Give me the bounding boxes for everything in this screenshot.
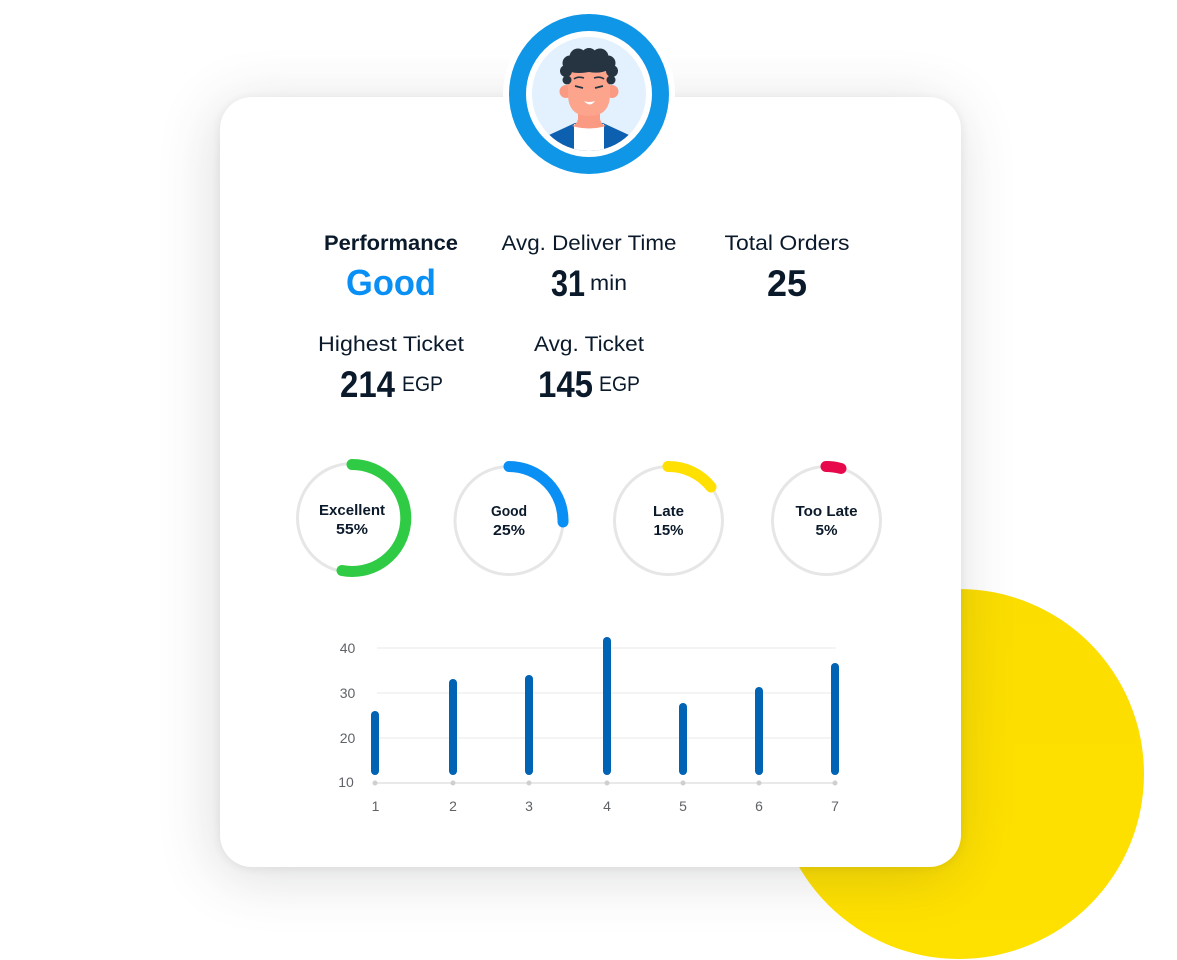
bar chart: 10 <box>338 774 354 790</box>
bar chart: 2 <box>449 798 457 814</box>
stat: average ticket: Avg. Ticket <box>534 333 644 356</box>
donut: late 15%: Late <box>653 504 684 520</box>
bar chart: 4 <box>603 798 611 814</box>
bar chart: 40 <box>340 640 355 656</box>
stat: average deliver time <box>502 232 676 304</box>
bar chart: 7 <box>831 798 839 814</box>
stat: average deliver time: min <box>590 272 627 295</box>
bar chart: 1 <box>372 798 380 814</box>
card shadow <box>216 98 962 876</box>
stat: performance <box>324 232 458 303</box>
donut: late 15%: 15% <box>654 523 684 539</box>
stat: highest ticket: 214 <box>340 364 395 405</box>
stat: highest ticket: Highest Ticket <box>318 333 464 356</box>
donut: good 25%: Good <box>491 504 527 520</box>
bar chart: 3 <box>525 798 533 814</box>
donut: too late 5%: Too Late <box>796 504 858 520</box>
stat: performance: Performance <box>324 232 458 255</box>
stat: total orders: Total Orders <box>724 232 850 255</box>
stat: total orders: 25 <box>767 263 807 304</box>
card panel <box>220 97 961 867</box>
avatar <box>518 22 660 166</box>
stat: average deliver time: 31 <box>551 263 585 304</box>
bar chart: 30 <box>340 685 355 701</box>
donut: good 25% <box>455 466 563 574</box>
bar chart <box>338 637 839 814</box>
donut: excellent 55%: 55% <box>336 522 368 538</box>
yellow circle <box>774 589 1144 959</box>
donut: excellent 55% <box>298 464 406 572</box>
stat: average ticket: 145 <box>538 364 593 405</box>
stat: average ticket <box>534 333 644 405</box>
donut: excellent 55%: Excellent <box>319 503 385 519</box>
stat: highest ticket <box>318 333 464 405</box>
donut: too late 5%: 5% <box>816 523 838 539</box>
donut: late 15% <box>614 466 722 574</box>
stat: total orders <box>724 232 850 304</box>
stat: performance: Good <box>346 262 436 303</box>
donut: too late 5% <box>772 466 880 574</box>
bar chart: 6 <box>755 798 763 814</box>
bar chart: 20 <box>340 730 355 746</box>
avatar halo <box>503 8 675 180</box>
stat: highest ticket: EGP <box>402 373 443 396</box>
stat: average ticket: EGP <box>599 373 640 396</box>
bar chart: 5 <box>679 798 687 814</box>
stat: average deliver time: Avg. Deliver Time <box>502 232 676 255</box>
donut: good 25%: 25% <box>493 523 525 539</box>
